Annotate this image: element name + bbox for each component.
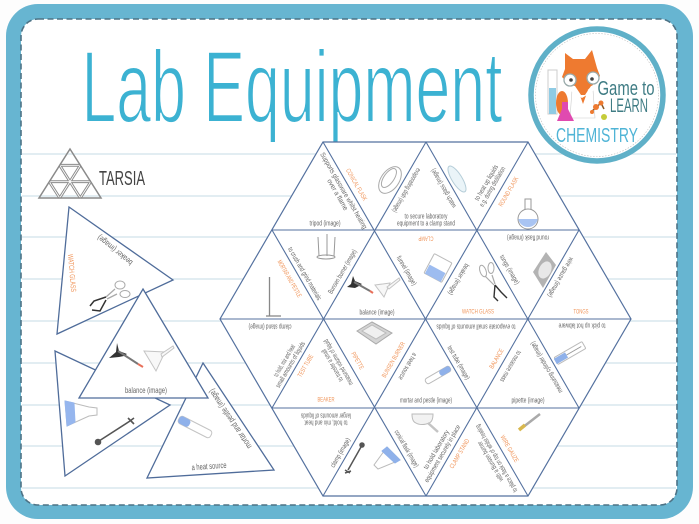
text: measure mass: to measure mass xyxy=(498,349,522,383)
chart: tarsia hexagon puzzle xyxy=(220,142,631,496)
text: pipette definition xyxy=(321,338,355,386)
text: game to: Game to xyxy=(598,78,654,100)
text: tripod definition: Supports glassware whilst heating xyxy=(318,152,368,230)
text: mortar definition: to crush and grind materials xyxy=(286,246,322,302)
text: wire gauze definition xyxy=(475,423,519,493)
text: funnel image: funnel (image) xyxy=(395,255,417,287)
icon: measuring cylinder xyxy=(553,342,586,365)
piece: loose triangle balance xyxy=(79,289,208,398)
icon: test tube xyxy=(177,415,213,439)
text: learn: LEARN xyxy=(610,96,648,117)
text: watch glass term: WATCH GLASS xyxy=(462,308,494,316)
icon: wire gauze xyxy=(533,252,556,288)
text: beaker image: beaker (image) xyxy=(446,262,470,296)
icon: clamp xyxy=(345,443,364,473)
text: wire gauze definition: with a Bunsen burner xyxy=(476,439,506,483)
heading: tarsia: TARSIA xyxy=(99,168,145,190)
text: clamp image: clamp (image) xyxy=(330,437,352,469)
text: round flask definition: e.g. during distillation xyxy=(479,166,507,208)
text: beaker term: BEAKER xyxy=(318,396,335,404)
icon: pink flask xyxy=(557,102,574,121)
text: measuring cylinder image: measuring cylinder (image) xyxy=(529,340,565,394)
piece: loose triangle watch glass xyxy=(57,207,173,334)
text: balance term: BALANCE xyxy=(488,347,506,370)
icon: graduated cylinder xyxy=(548,70,557,114)
text: test tube definition: to hold, mix and heat xyxy=(273,344,297,378)
icon: round flask xyxy=(518,199,538,229)
icon: watch glass xyxy=(445,164,469,194)
text: test tube definition: small amounts of liquids xyxy=(275,340,307,389)
text: pipette term: PIPETTE xyxy=(349,351,365,371)
text: chemistry: CHEMISTRY xyxy=(556,124,638,147)
text: watch glass term: WATCH GLASS xyxy=(66,254,78,292)
text: evaporate definition: to evaporate small amounts of liquids xyxy=(436,322,516,330)
text: wire gauze definition: to place a flask on top of whilst heating xyxy=(475,423,519,493)
icon: conical flask xyxy=(374,447,400,469)
text: clamp stand definition xyxy=(423,424,462,484)
icon: clamp stand xyxy=(266,277,281,316)
text: mortar term: MORTAR AND PESTLE xyxy=(275,259,303,299)
text: beaker definition: to hold, mix and heat xyxy=(304,418,348,426)
text: tripod definition xyxy=(318,152,368,230)
piece: loose triangle heat source: mortar and pestle (image) xyxy=(206,387,254,451)
piece: loose triangle flask and clamp xyxy=(55,351,170,476)
icon: test tube xyxy=(424,365,452,385)
icon: pipette xyxy=(519,414,540,430)
text: test tube definition xyxy=(273,340,307,389)
icon: funnel xyxy=(375,278,400,297)
text: beaker definition: larger amounts of liquids xyxy=(301,412,351,418)
text: round flask definition xyxy=(474,164,507,208)
text: clamp stand definition: equipment securely in place xyxy=(424,424,462,484)
piece: loose triangle heat source xyxy=(147,363,274,478)
icon: clamp xyxy=(96,418,134,444)
text: pipette image: pipette (image) xyxy=(512,398,544,404)
text: tongs term: TONGS xyxy=(574,308,589,316)
icon: bunsen burner xyxy=(109,343,143,367)
icon: balance xyxy=(357,322,392,344)
text: heat source: a heat source xyxy=(191,460,227,472)
icon: funnel xyxy=(144,346,174,371)
icon: fox scientist xyxy=(556,50,600,118)
piece: loose triangle watch glass: beaker (image) xyxy=(95,233,135,267)
text: bunsen burner image: Bunsen burner (image) xyxy=(327,249,359,295)
text: balance image: balance (image) xyxy=(360,310,394,316)
text: pipette definition: to transfer a small xyxy=(321,347,345,382)
text: wire gauze term: WIRE GAUZE xyxy=(498,434,520,464)
text: conical flask term: CONICAL FLASK xyxy=(344,168,368,203)
text: clamp definition xyxy=(397,214,455,228)
icon: tripod xyxy=(317,234,335,259)
text: tongs definition: to pick up hot labware xyxy=(558,322,606,328)
logo: game to learn chemistry xyxy=(531,29,663,161)
text: clamp term: CLAMP xyxy=(418,234,434,242)
text: tongs image: tongs (image) xyxy=(498,254,520,286)
text: watch glass image: watch glass (image) xyxy=(430,167,458,209)
text: round flask term: ROUND FLASK xyxy=(498,176,521,208)
text: clamp stand image: clamp stand (image) xyxy=(248,322,292,330)
text: round flask image: round flask (image) xyxy=(507,234,549,240)
icon: tarsia triangle xyxy=(39,149,101,198)
text: heat source: a heat source xyxy=(396,351,418,381)
icon: crucible xyxy=(374,163,406,197)
text: dish image: evaporating dish (image) xyxy=(390,167,422,213)
icon: conical flask xyxy=(65,401,97,426)
text: pipette definition: measured volume of liquid xyxy=(323,338,355,386)
text: conical flask image: conical flask (image) xyxy=(392,429,420,469)
text: clamp stand term: CLAMP STAND xyxy=(449,438,471,470)
text: tripod definition: over a flame xyxy=(325,178,349,212)
text: clamp stand definition: to hold laboratory xyxy=(423,429,451,471)
text: test tube term: TEST TUBE xyxy=(297,353,316,379)
text: test tube image: test tube (image) xyxy=(445,345,471,381)
text: beaker definition xyxy=(301,412,351,426)
icon: scissors and tongs xyxy=(90,281,130,311)
icon: beaker xyxy=(424,254,452,282)
text: clamp definition: equipment to a clamp stand xyxy=(397,220,455,228)
icon: bunsen burner xyxy=(347,276,373,293)
piece: loose triangle balance: balance (image) xyxy=(125,385,167,395)
icon: scissors and tongs xyxy=(478,262,507,301)
icon: molecule xyxy=(590,100,607,120)
icon: evaporating dish xyxy=(412,414,438,432)
text: clamp definition: to secure laboratory xyxy=(404,214,448,220)
text: bunsen burner term: BUNSEN BURNER xyxy=(381,341,407,379)
text: mortar image: mortar and pestle (image) xyxy=(400,398,452,404)
text: tripod: tripod (image) xyxy=(310,220,340,228)
text: wire gauze image: wire gauze (image) xyxy=(546,255,575,298)
text: round flask definition: to heat up liquids xyxy=(474,164,500,202)
